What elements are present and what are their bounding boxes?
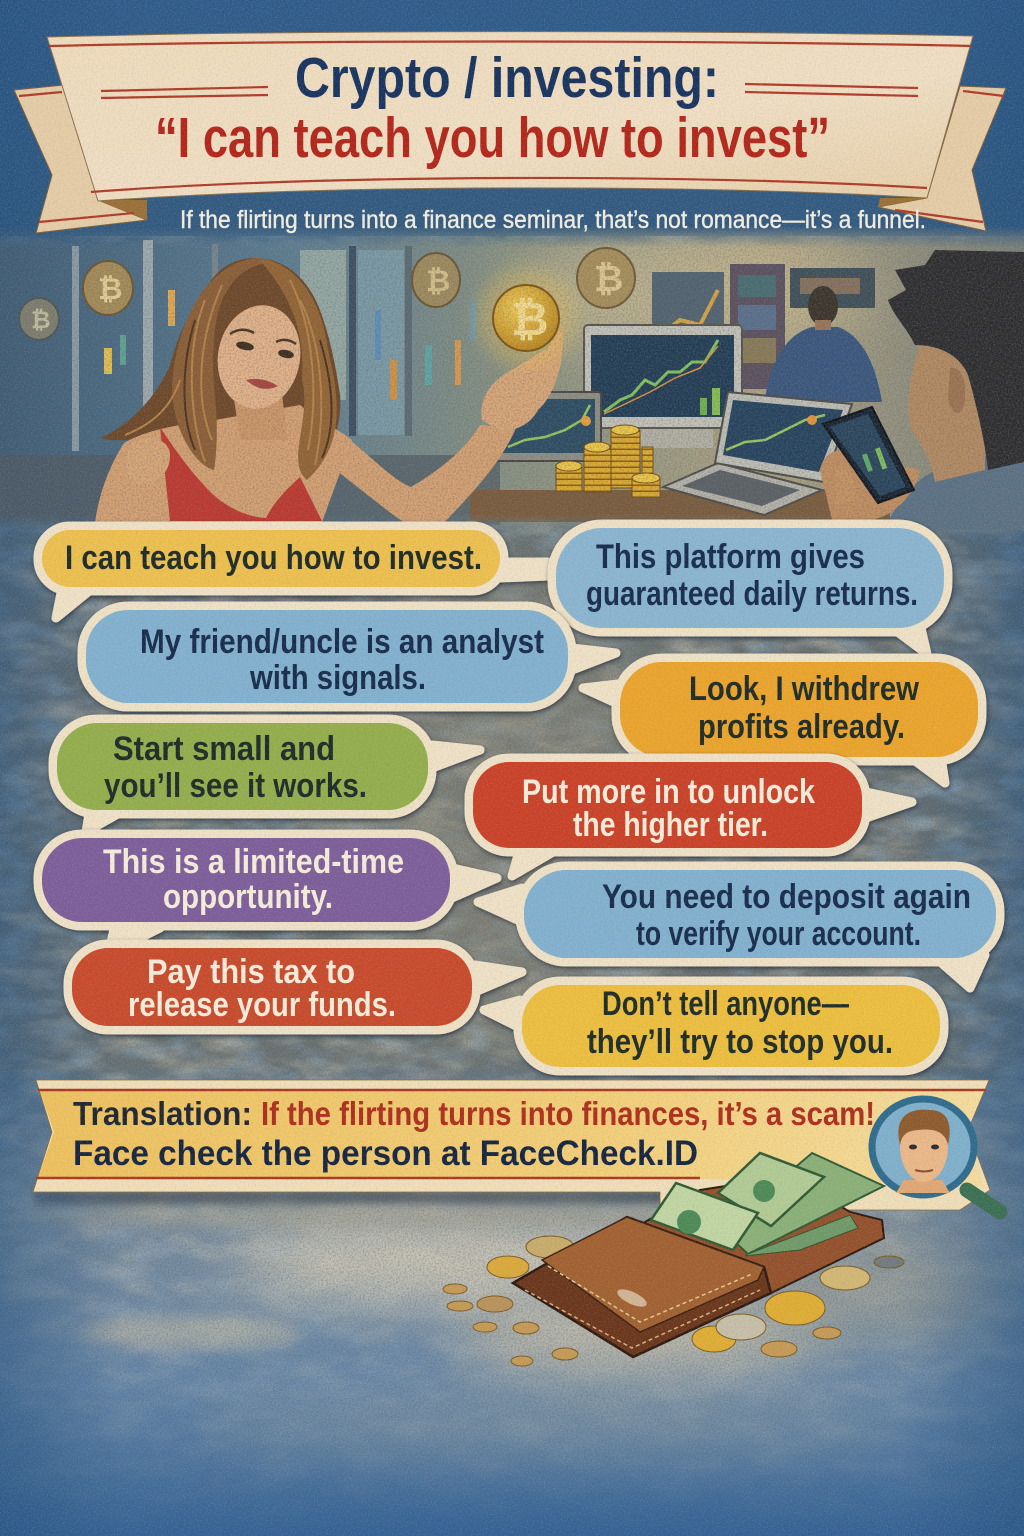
speech bubble: guaranteed returns: guaranteed daily returns. <box>586 575 918 613</box>
figure: man holding phone <box>885 250 1024 530</box>
speech bubble: I can teach you: I can teach you how to invest. <box>65 539 482 577</box>
speech bubble: pay tax: Pay this tax to <box>147 953 355 991</box>
speech bubble: pay tax: release your funds. <box>128 986 396 1024</box>
speech bubble: start small: Start small and <box>113 730 335 768</box>
room backdrop <box>0 226 1024 536</box>
speech bubble: higher tier: Put more in to unlock <box>522 773 815 811</box>
window frames and candlestick charts <box>72 240 476 520</box>
icons: wall bitcoins: ₿ <box>426 265 450 298</box>
monitor with rising chart <box>584 325 742 448</box>
background shelves of screens <box>652 264 875 389</box>
hair back <box>101 258 340 480</box>
icon: magnifying glass with face <box>872 1099 1000 1212</box>
hair front <box>172 258 270 470</box>
raised hand <box>481 325 563 430</box>
speech bubble: don't tell anyone: Don’t tell anyone— <box>602 985 849 1023</box>
icons: wall bitcoins <box>19 248 635 340</box>
title ribbon <box>14 32 1006 234</box>
tablet with chart <box>496 392 601 461</box>
illustration: trading room scene <box>0 226 1024 536</box>
wallet back <box>640 1176 884 1293</box>
title line 2: “I can teach you how to invest” <box>155 106 830 170</box>
handle <box>967 1190 1000 1212</box>
ribbon left tail <box>14 85 147 233</box>
icons: wall bitcoins: ₿ <box>31 307 51 334</box>
speech bubble: don't tell anyone <box>484 981 944 1071</box>
icons: wall bitcoins: ₿ <box>98 273 122 306</box>
subtitle: If the flirting turns into a finance seminar, that’s not romance—it’s a funnel. <box>180 206 926 234</box>
lens <box>872 1099 974 1195</box>
scattered coins <box>443 1236 904 1366</box>
speech bubble: limited-time <box>38 834 497 954</box>
speech bubble: analyst signals: with signals. <box>249 659 426 697</box>
speech bubble: analyst signals <box>82 606 616 707</box>
face <box>896 1180 950 1193</box>
speech bubble: deposit again: You need to deposit again <box>602 878 971 916</box>
speech bubble: start small: you’ll see it works. <box>104 767 367 805</box>
speech bubble: withdrew profits: profits already. <box>698 708 905 746</box>
ribbon main panel <box>47 32 973 201</box>
speech bubble: withdrew profits: Look, I withdrew <box>689 670 919 708</box>
banner yellow field <box>38 1091 984 1186</box>
speech bubble: don't tell anyone: they’ll try to stop you. <box>587 1023 893 1061</box>
neck and face <box>232 385 288 440</box>
hair strands <box>125 280 321 465</box>
icons: wall bitcoins: ₿ <box>594 258 623 299</box>
banner text line 2: Face check the person at FaceCheck.ID <box>73 1134 698 1173</box>
speech bubble: limited-time: opportunity. <box>163 878 333 916</box>
figure: man in background <box>764 286 882 402</box>
bill back <box>722 1153 884 1254</box>
banner parchment rim <box>33 1080 990 1210</box>
speech bubble: deposit again: to verify your account. <box>636 915 921 953</box>
speech bubble: analyst signals: My friend/uncle is an analyst <box>140 623 544 661</box>
translation banner: If the flirting turns into finances, it’s a scam! <box>261 1095 875 1132</box>
ribbon right tail <box>878 86 1006 231</box>
translation banner <box>33 1080 990 1210</box>
bill low <box>745 1215 858 1256</box>
shoulders and left arm <box>95 405 352 522</box>
gold coin stacks <box>556 425 660 497</box>
speech bubble: higher tier <box>469 758 912 876</box>
hand on pole <box>126 438 170 484</box>
speech bubble: deposit again <box>478 866 1000 988</box>
figure: woman holding a bitcoin <box>95 258 563 523</box>
speech bubble: higher tier: the higher tier. <box>573 806 768 844</box>
wallet with cash and coins <box>443 1153 904 1366</box>
laptop with chart <box>663 392 852 515</box>
speech bubble: pay tax <box>68 944 522 1030</box>
icon: glowing gold bitcoin <box>476 268 576 368</box>
speech bubble: start small <box>53 719 480 832</box>
title line 1: Crypto / investing: <box>295 46 719 110</box>
speech bubble: I can teach you <box>38 526 548 618</box>
banner text line 1: Translation: <box>73 1095 252 1132</box>
wallet front flap <box>513 1217 771 1357</box>
speech bubble: guaranteed returns <box>552 524 948 654</box>
speech bubble: limited-time: This is a limited-time <box>103 843 404 881</box>
icon: glowing gold bitcoin: ₿ <box>511 293 548 345</box>
speech bubble: withdrew profits <box>583 658 982 783</box>
phone in hand <box>820 407 920 520</box>
bill middle <box>718 1153 824 1226</box>
red dress <box>160 427 322 521</box>
speech bubble: guaranteed returns: This platform gives <box>596 538 865 576</box>
arm to coin <box>326 425 516 523</box>
bill front <box>651 1183 758 1250</box>
